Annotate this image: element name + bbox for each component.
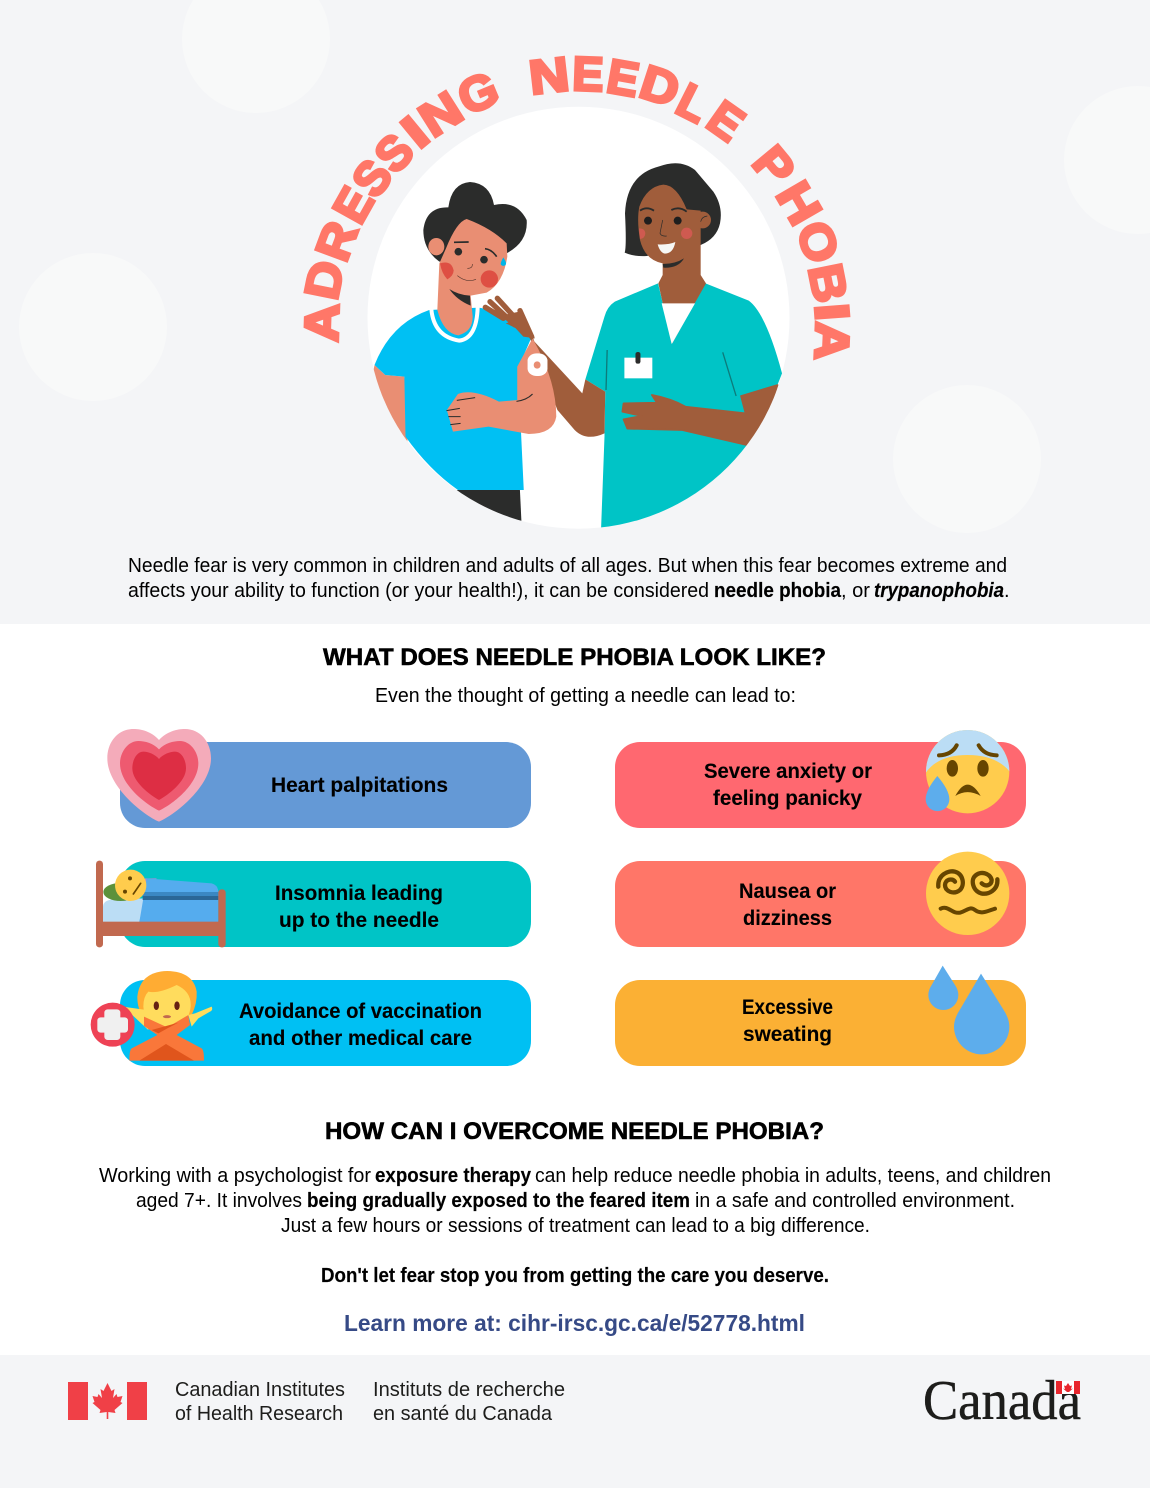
title — [294, 47, 860, 361]
title: G — [450, 62, 506, 126]
panel: sweating: sweating — [743, 1023, 832, 1046]
organization name: Instituts de recherche — [373, 1379, 565, 1401]
panel: nausea — [615, 852, 1026, 947]
title: E — [572, 47, 604, 102]
organization name: en santé du Canada — [373, 1403, 553, 1425]
panel: nausea: Nausea or — [739, 880, 836, 903]
organization name: of Health Research — [175, 1403, 343, 1425]
panel: sweating: Excessive — [742, 996, 833, 1019]
patient head — [423, 182, 535, 341]
title: E — [603, 50, 643, 108]
panel: severe anxiety: feeling panicky — [713, 787, 862, 810]
title: E — [697, 91, 754, 153]
panel: heart palpitations — [107, 729, 531, 828]
panel: severe anxiety: Severe anxiety or — [704, 760, 872, 783]
icon: person crossing arms — [91, 971, 212, 1061]
organization name — [175, 1379, 565, 1425]
title: D — [634, 55, 686, 118]
heading: what does needle phobia look like: WHAT DOES NEEDLE PHOBIA LOOK LIKE? — [323, 644, 826, 671]
panel: avoidance — [91, 971, 531, 1066]
title: N — [526, 47, 572, 104]
title: H — [766, 172, 832, 234]
panel: avoidance: Avoidance of vaccination — [239, 1000, 482, 1023]
body paragraph — [99, 1165, 1051, 1237]
title: N — [409, 80, 472, 147]
title: A — [804, 321, 860, 361]
intro text: trypanophobia — [874, 580, 1004, 602]
Canada wordmark: Canada — [923, 1370, 1081, 1432]
intro text: , or — [841, 580, 870, 602]
title: E — [323, 179, 385, 232]
intro text — [128, 555, 1010, 602]
icon: Canadian flag symbol — [68, 1382, 147, 1420]
body paragraph: aged 7+. It involves — [136, 1190, 302, 1212]
body paragraph: Working with a psychologist for — [99, 1165, 371, 1187]
panel: avoidance: and other medical care — [249, 1027, 472, 1050]
panel: insomnia: up to the needle — [279, 909, 439, 932]
title: A — [294, 303, 349, 343]
title: S — [364, 124, 425, 183]
heading: how can I overcome needle phobia: HOW CAN I OVERCOME NEEDLE PHOBIA? — [325, 1118, 824, 1145]
illustration: patient and nurse — [357, 107, 790, 540]
icon: heart — [107, 729, 211, 822]
body paragraph: being gradually exposed to the feared item — [307, 1190, 690, 1212]
title: S — [342, 150, 403, 207]
icon: sweat drops — [928, 966, 1009, 1054]
panel: insomnia: Insomnia leading — [275, 882, 443, 905]
title: R — [305, 214, 369, 268]
organization name: Canadian Institutes — [175, 1379, 345, 1401]
body paragraph: Just a few hours or sessions of treatment can lead to a big difference. — [281, 1215, 870, 1237]
body paragraph: exposure therapy — [375, 1165, 532, 1187]
body paragraph: in a safe and controlled environment. — [695, 1190, 1015, 1212]
panel: severe anxiety — [615, 727, 1026, 828]
panel: sweating — [615, 966, 1026, 1066]
panel: nausea: dizziness — [743, 907, 832, 930]
panel: heart palpitations: Heart palpitations — [271, 774, 448, 797]
footer panel — [0, 1355, 1150, 1488]
icon: anxious face — [926, 730, 1010, 814]
nurse head — [625, 163, 721, 344]
title: D — [295, 256, 355, 304]
panel: insomnia — [96, 861, 531, 947]
hero background panel — [0, 0, 1150, 624]
title: L — [668, 72, 718, 133]
body paragraph: can help reduce needle phobia in adults, teens, and children — [535, 1165, 1051, 1187]
title: B — [798, 259, 858, 307]
intro text: affects your ability to function (or your health!), it can be considered — [128, 580, 709, 602]
link: Learn more at: cihr-irsc.gc.ca/e/52778.html — [344, 1310, 805, 1336]
title: P — [742, 136, 806, 197]
call to action: Don't let fear stop you from getting the care you deserve. — [321, 1265, 829, 1287]
icon: dizzy face — [926, 852, 1009, 935]
intro text: . — [1004, 580, 1010, 602]
title: I — [391, 106, 439, 158]
title: I — [805, 301, 859, 323]
icon: bed — [96, 861, 226, 947]
title: O — [786, 214, 850, 270]
subheading: Even the thought of getting a needle can lead to: — [375, 685, 796, 707]
intro text: Needle fear is very common in children and adults of all ages. But when this fear becomes extreme and — [128, 555, 1007, 577]
intro text: needle phobia — [714, 580, 842, 602]
